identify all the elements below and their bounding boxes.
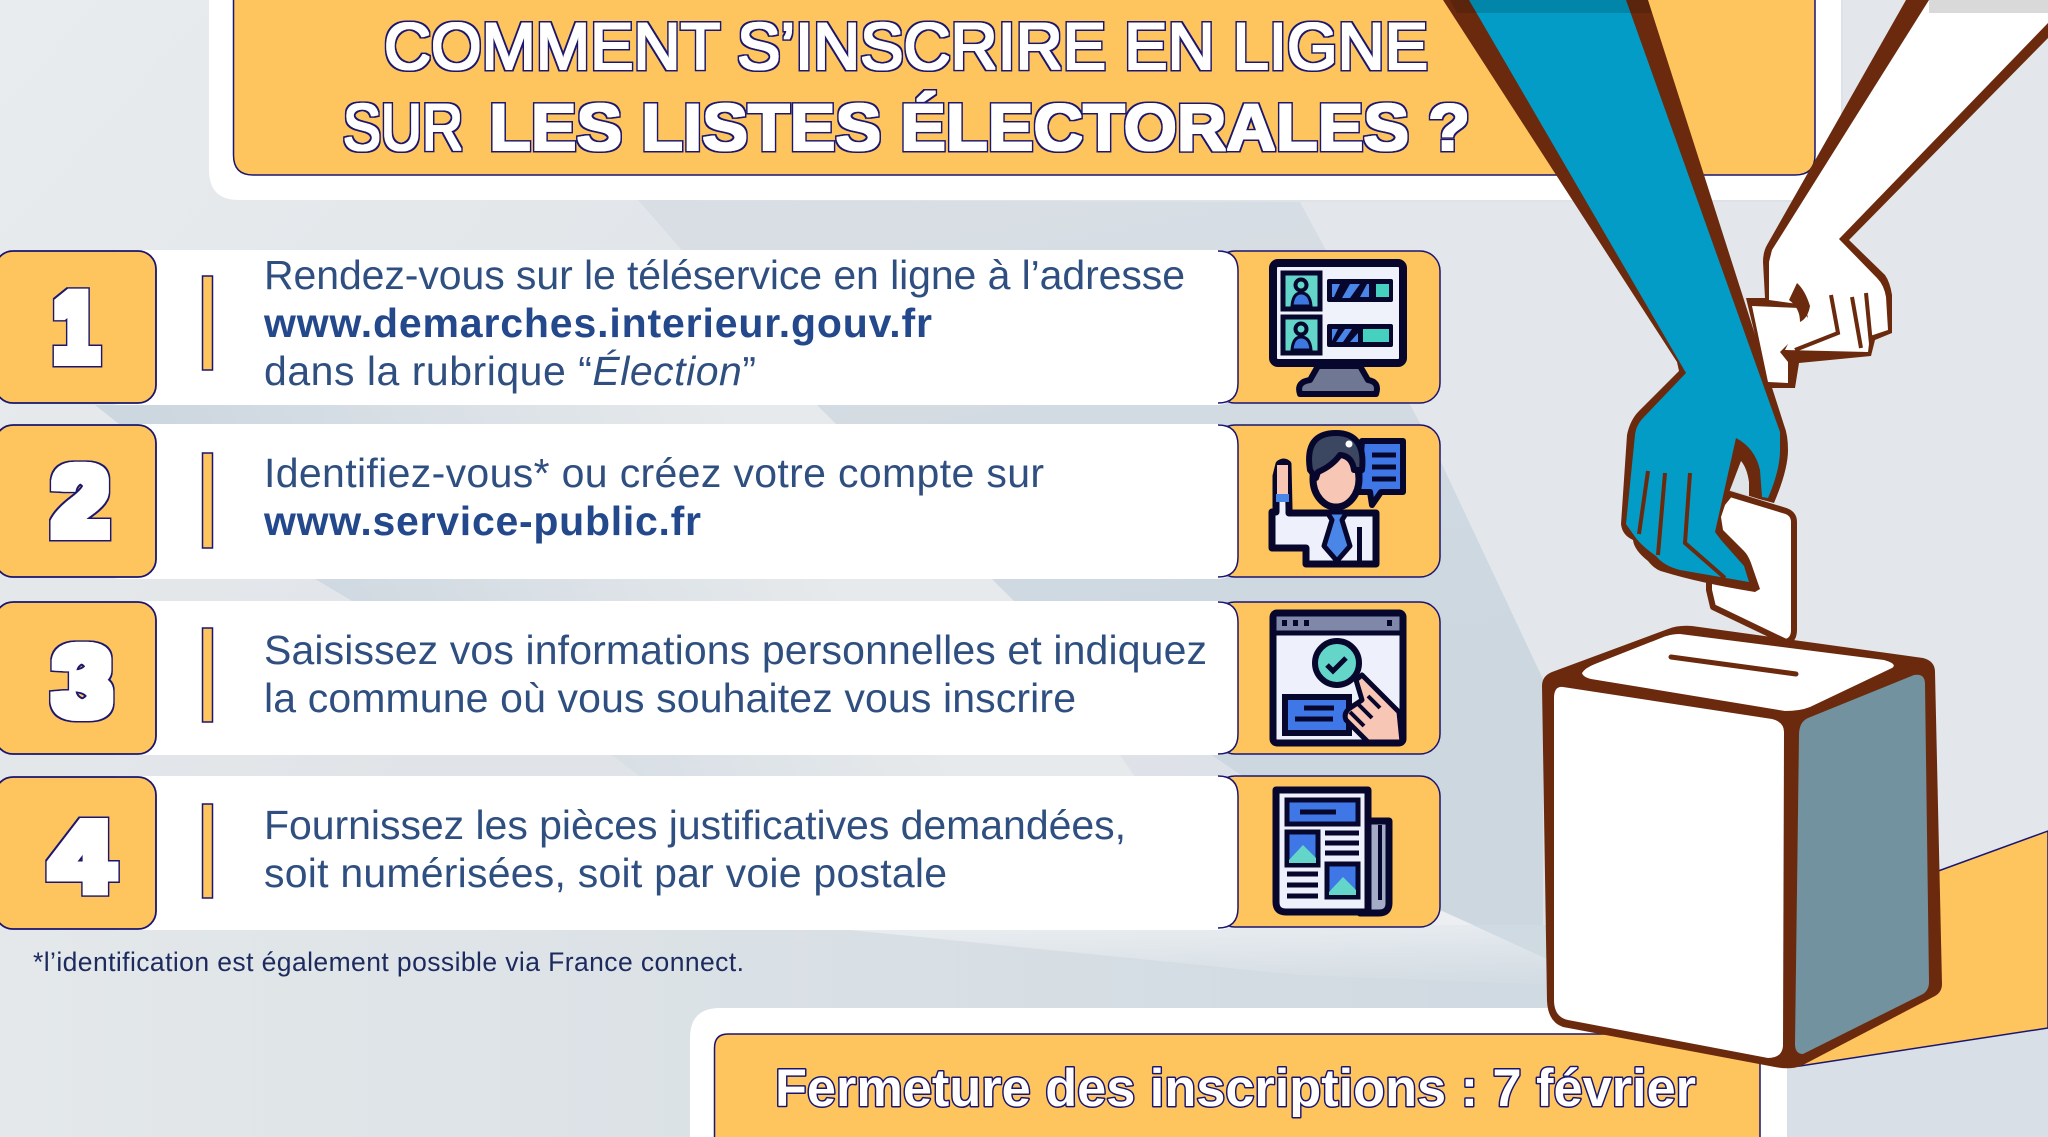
- step number 3: 3: [53, 627, 112, 736]
- step 2 text: [263, 450, 1044, 544]
- step 1 text: Rendez-vous sur le téléservice en ligne à l’adresse: [264, 252, 1185, 298]
- step 4 text: Fournissez les pièces justificatives demandées,: [264, 802, 1126, 848]
- step 3 text: [264, 627, 1207, 721]
- panel: title banner: [209, 0, 1841, 200]
- panel: step 3: [0, 601, 1440, 755]
- icon: blue arm and hand: [1443, 0, 1788, 592]
- step 3 text: Saisissez vos informations personnelles et indiquez: [264, 627, 1207, 673]
- title: LES LISTES ÉLECTORALES ?: [489, 90, 1470, 164]
- icon: white arm and hand: [1746, 0, 2048, 388]
- panel: closing date banner: [690, 1008, 1787, 1137]
- step 4 text: soit numérisées, soit par voie postale: [264, 850, 947, 896]
- icon: newspaper: [1276, 790, 1389, 913]
- title: COMMENT S’INSCRIRE EN LIGNE: [384, 9, 1428, 83]
- step 3 text: la commune où vous souhaitez vous inscrire: [264, 675, 1076, 721]
- panel: step 4: [0, 776, 1440, 930]
- icon: voting screen: [1273, 263, 1403, 394]
- panel: step 1: [0, 250, 1440, 405]
- icon: browser window with pointing hand: [1273, 613, 1403, 743]
- panel: step 2: [0, 424, 1440, 579]
- step 1 text: www.demarches.interieur.gouv.fr: [263, 300, 932, 346]
- title: [343, 9, 1470, 164]
- step number 4: 4: [50, 802, 114, 911]
- icon: ballot paper, lower: [1709, 494, 1794, 642]
- step 4 text: [264, 802, 1126, 896]
- orange wedge behind ballot box: [1800, 831, 2048, 1066]
- icon: person with speech bubble: [1272, 433, 1403, 564]
- step 2 text: Identifiez-vous* ou créez votre compte sur: [264, 450, 1044, 496]
- footnote: *l’identification est également possible via France connect.: [33, 947, 744, 977]
- step number 1: 1: [54, 273, 98, 382]
- step number 2: 2: [52, 447, 109, 556]
- step 1 text: [263, 252, 1185, 394]
- step 1 text: dans la rubrique “Élection”: [264, 348, 756, 394]
- closing date text: Fermeture des inscriptions : 7 février: [775, 1059, 1696, 1118]
- title: SUR: [343, 90, 463, 164]
- step 2 text: www.service-public.fr: [263, 498, 701, 544]
- icon: ballot box: [1542, 626, 1942, 1068]
